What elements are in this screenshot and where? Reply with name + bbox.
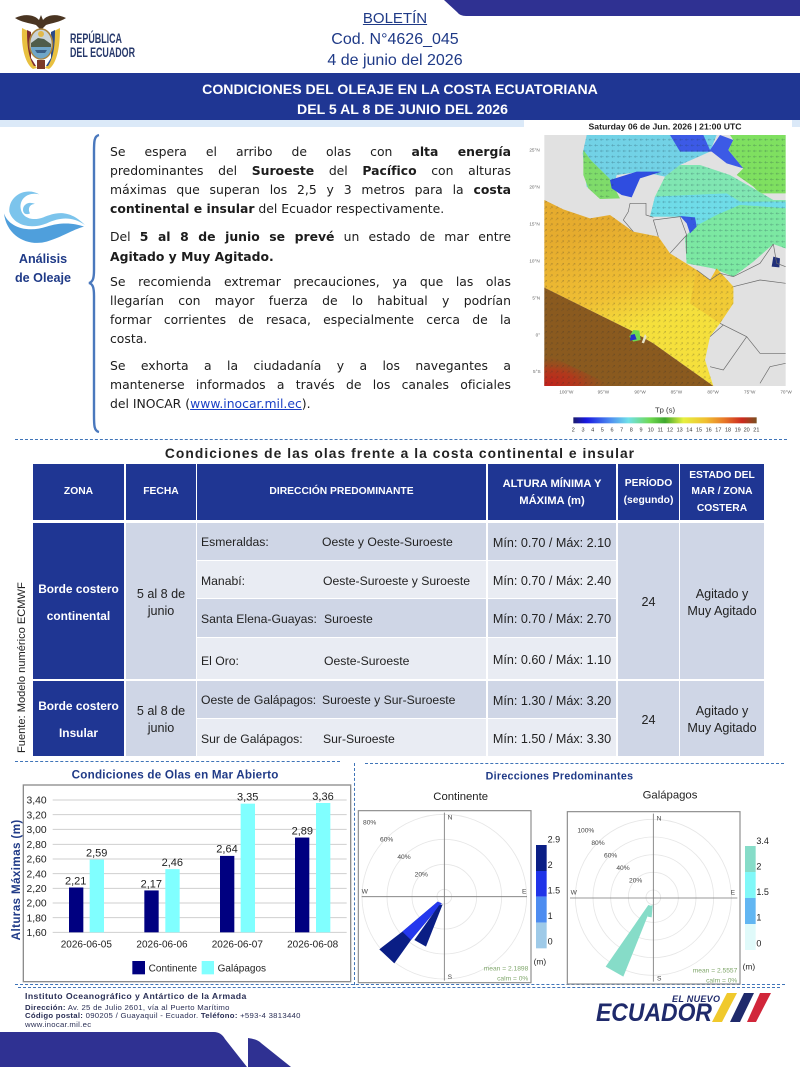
rose: Continente: 2.9: [548, 834, 560, 844]
table: wave conditions: ZONA: [64, 486, 93, 497]
latitude and longitude labels: 80°W: [707, 389, 719, 394]
rose: Galápagos: N: [657, 816, 662, 823]
analysis text: máximas que superan los 2,5 y 3 metros para la costa: [110, 182, 511, 197]
analysis text: formar corrientes de resaca, especialmente cerca de la: [110, 312, 511, 327]
rose: Continente: W: [362, 888, 369, 895]
table: wave conditions: Mín: 0.60 / Máx: 1.10: [493, 652, 611, 666]
latitude and longitude labels: 5°N: [532, 295, 540, 300]
colour bar: [572, 405, 759, 433]
bar value labels: 2,89: [292, 825, 313, 837]
rose: Continente: mean = 2.1898: [484, 965, 529, 972]
latitude and longitude labels: 10°N: [529, 259, 540, 264]
table: wave conditions: 24: [641, 595, 656, 609]
table: wave conditions: ALTURA MÍNIMA Y: [503, 478, 601, 490]
rose: Continente: calm = 0%: [497, 975, 528, 982]
y axis labels: 3,00: [27, 825, 47, 836]
bulletin heading: [327, 10, 463, 69]
logo: El Nuevo Ecuador: ECUADOR: [596, 999, 712, 1027]
rose: Galápagos: [567, 789, 769, 984]
rose: Continente: [358, 791, 560, 983]
table: wave conditions: Suroeste: [324, 612, 373, 626]
colour bar: 7: [620, 427, 623, 433]
rose: Galápagos: 2: [756, 862, 761, 872]
title band: DEL 5 AL 8 DE JUNIO DEL 2026: [297, 101, 508, 117]
bulletin heading: 4 de junio del 2026: [327, 52, 463, 69]
rose: Continente: 0: [548, 937, 553, 947]
rose: Continente: E: [522, 888, 527, 895]
rose: Galápagos: (m): [743, 962, 755, 972]
analysis text: continental e insular del Ecuador respectivamente.: [110, 201, 444, 216]
table: wave conditions: Sur de Galápagos:: [201, 732, 303, 746]
section label: Análisis de Oleaje: Análisis: [19, 252, 67, 266]
table: wave conditions: Oeste de Galápagos:: [201, 693, 316, 707]
rose: Galápagos: 40%: [616, 865, 630, 872]
table: wave conditions: (segundo): [624, 494, 673, 506]
y axis labels: 3,20: [27, 810, 47, 821]
y axis labels: [27, 796, 47, 939]
colour bar: Tp (s): [655, 405, 675, 414]
table: wave conditions: Sur-Suroeste: [323, 732, 395, 746]
logo: República del Ecuador emblem: [15, 15, 135, 69]
bars: Continente: [69, 838, 309, 932]
rose: Galápagos: E: [731, 890, 736, 897]
rose: Galápagos: 1: [756, 913, 761, 923]
legend: Galápagos: [218, 964, 266, 975]
rose: Galápagos: calm = 0%: [706, 977, 737, 984]
table: wave conditions: Borde costero: [38, 699, 119, 713]
analysis text: Se espera el arribo de olas con alta energía: [110, 144, 511, 159]
country borders: [623, 203, 786, 383]
analysis text: llegarían con mayor fuerza de lo habitual y podrían: [110, 293, 511, 308]
table: wave conditions: El Oro:: [201, 654, 239, 668]
table: wave conditions: PERÍODO: [625, 478, 672, 489]
colour bar: 18: [725, 427, 731, 433]
y axis labels: 2,40: [27, 869, 47, 880]
colour bar: 4: [591, 427, 594, 433]
footer institution text: Código postal: 090205 / Guayaquil - Ecuador. Teléfono: +593-4 3813440: [25, 1011, 301, 1020]
latitude and longitude labels: 0°: [536, 332, 540, 337]
table: wave conditions: MAR / ZONA: [691, 486, 753, 497]
colour bar: 21: [753, 427, 759, 433]
analysis text: mantenerse informados a través de los canales oficiales: [110, 377, 511, 392]
table title: Condiciones de las olas frente a la costa continental e insular: [165, 446, 635, 461]
Galapagos islands patch: [629, 330, 647, 343]
y axis title: Alturas Máximas (m): [10, 820, 23, 940]
rose: Continente: 60%: [380, 837, 393, 844]
brace: [88, 134, 100, 434]
y axis labels: 1,80: [27, 913, 47, 924]
rose: Galápagos: 20%: [629, 878, 642, 885]
rose: Galápagos: S: [657, 976, 662, 983]
logo: El Nuevo Ecuador: [596, 993, 771, 1027]
y axis labels: 1,60: [27, 928, 47, 939]
y axis labels: 2,80: [27, 840, 47, 851]
latitude and longitude labels: 25°N: [529, 147, 540, 152]
x axis labels: [61, 940, 339, 951]
rose: Continente: 1.5: [548, 886, 560, 896]
y axis labels: 2,20: [27, 884, 47, 895]
colour bar: 8: [630, 427, 633, 433]
table: wave conditions: DIRECCIÓN PREDOMINANTE: [269, 486, 414, 497]
rose: Continente: 80%: [363, 819, 376, 826]
latitude and longitude labels: 70°W: [780, 389, 792, 394]
table: wave conditions: Oeste-Suroeste: [324, 654, 409, 668]
table: wave conditions: Mín: 1.30 / Máx: 3.20: [493, 694, 611, 708]
table: wave conditions: Mín: 1.50 / Máx: 3.30: [493, 732, 611, 746]
footer institution text: Instituto Oceanográfico y Antártico de la Armada: [25, 991, 247, 1001]
latitude and longitude labels: 20°N: [529, 184, 540, 189]
y axis labels: 3,40: [27, 796, 47, 807]
bar value labels: 2,21: [65, 875, 86, 887]
bulletin heading: BOLETÍN: [363, 10, 427, 27]
latitude and longitude labels: 15°N: [529, 222, 540, 227]
rose: Continente: S: [448, 974, 453, 981]
colour bar: 5: [601, 427, 604, 433]
title band: CONDICIONES DEL OLEAJE EN LA COSTA ECUATORIANA: [202, 81, 598, 97]
table: wave conditions: Suroeste y Sur-Suroeste: [322, 693, 455, 707]
table: wave conditions: Mín: 0.70 / Máx: 2.10: [493, 536, 611, 550]
table: wave conditions: junio: [148, 604, 174, 618]
colour bar: 20: [744, 427, 750, 433]
table: wave conditions: Agitado y: [696, 704, 748, 718]
colour bar: 3: [581, 427, 585, 433]
table: wave conditions: COSTERA: [697, 503, 747, 514]
latitude and longitude labels: 85°W: [671, 389, 683, 394]
table: wave conditions: ESTADO DEL: [689, 470, 755, 481]
table: wave conditions: Muy Agitado: [687, 604, 757, 618]
colour bar: 15: [696, 427, 702, 433]
colour bar: 13: [677, 427, 683, 433]
table: wave conditions: Mín: 0.70 / Máx: 2.70: [493, 612, 611, 626]
footer institution text: www.inocar.mil.ec: [25, 1020, 91, 1029]
rose: Galápagos: 0: [756, 938, 761, 948]
table: wave conditions: Insular: [59, 726, 98, 740]
bulletin heading: Cod. N°4626_045: [331, 31, 459, 48]
colour bar: 16: [706, 427, 712, 433]
logo: República del Ecuador emblem: DEL ECUADOR: [70, 45, 135, 60]
table: wave conditions: [33, 464, 764, 756]
analysis text: predominantes del Suroeste del Pacífico con alturas: [110, 163, 511, 178]
rose: Galápagos: 60%: [604, 852, 617, 859]
latitude and longitude labels: 5°S: [533, 369, 541, 374]
analysis text: [110, 144, 511, 411]
colour bar: 17: [715, 427, 721, 433]
Caribbean waves: [583, 135, 786, 277]
table: wave conditions: 5 al 8 de: [137, 586, 185, 600]
latitude and longitude labels: [529, 147, 792, 394]
roses heading: Direcciones Predominantes: [486, 770, 633, 782]
bar value labels: [65, 791, 334, 891]
rose: Continente: 40%: [397, 854, 411, 861]
wind roses: predominant directions: [358, 770, 769, 985]
table: wave conditions: Agitado y: [696, 586, 748, 600]
bars: Galápagos: [90, 803, 330, 932]
chart frame: [23, 785, 351, 982]
analysis text: Del 5 al 8 de junio se prevé un estado de mar entre: [110, 229, 511, 244]
bar value labels: 3,36: [312, 791, 334, 803]
table: wave conditions: Muy Agitado: [687, 721, 757, 735]
gulf of Mexico waves: [583, 135, 786, 199]
Pacific orange-yellow swell: [544, 200, 733, 386]
rose: Galápagos: 3.4: [756, 836, 769, 846]
rose: Galápagos: Galápagos: [643, 789, 698, 801]
Pacific long period swell: [544, 288, 713, 386]
table: wave conditions: Esmeraldas:: [201, 535, 269, 549]
icon: wave: [4, 192, 85, 243]
section label: Análisis de Oleaje: de Oleaje: [15, 271, 71, 285]
colour bar: 14: [686, 427, 692, 433]
colour bar: 12: [667, 427, 673, 433]
x axis labels: 2026-06-08: [287, 940, 339, 951]
colour bar: 10: [648, 427, 654, 433]
y axis labels: 2,00: [27, 899, 47, 910]
colour bar: 2: [572, 427, 575, 433]
analysis text: Se exhorta a la ciudadanía y a los navegantes a: [110, 358, 511, 373]
latitude and longitude labels: 75°W: [744, 389, 756, 394]
logo: El Nuevo Ecuador: EL NUEVO: [672, 994, 720, 1004]
light strip under title band: [0, 120, 800, 127]
analysis text: Se recomienda extremar precauciones, ya que las olas: [110, 274, 511, 289]
table: wave conditions: Oeste-Suroeste y Suroeste: [323, 574, 470, 588]
x axis labels: 2026-06-07: [212, 940, 263, 951]
latitude and longitude labels: 95°W: [598, 389, 610, 394]
bar value labels: 2,59: [86, 848, 107, 860]
colour bar: 6: [610, 427, 614, 433]
y axis labels: 2,60: [27, 855, 47, 866]
analysis text: costa.: [110, 331, 147, 346]
bar value labels: 2,17: [141, 879, 162, 891]
table: wave conditions: FECHA: [143, 486, 179, 497]
source note: Fuente: Modelo numérico ECMWF: [16, 582, 28, 753]
analysis text: Agitado y Muy Agitado.: [110, 249, 274, 264]
legend: [132, 961, 266, 975]
chart title: Condiciones de Olas en Mar Abierto: [72, 768, 278, 781]
rose: Continente: 2: [548, 860, 553, 870]
red high period corner: [544, 353, 613, 386]
latitude and longitude labels: 100°W: [559, 389, 574, 394]
bar chart: maximum heights: [10, 768, 352, 982]
table: wave conditions: Oeste y Oeste-Suroeste: [322, 535, 453, 549]
rose: Galápagos: mean = 2.5557: [693, 967, 738, 974]
bar value labels: 2,46: [162, 857, 183, 869]
map timestamp: Saturday 06 de Jun. 2026 | 21:00 UTC: [588, 121, 742, 131]
rose: Continente: (m): [534, 957, 546, 967]
rose: Continente: 1: [548, 911, 553, 921]
footer corner shape: [0, 1032, 291, 1067]
legend: Continente: [149, 964, 197, 975]
rose: Continente: 20%: [415, 871, 428, 878]
rose: Galápagos: 80%: [591, 840, 605, 847]
bar value labels: 2,64: [216, 844, 238, 856]
rose: Galápagos: 100%: [577, 827, 594, 834]
x axis labels: 2026-06-06: [136, 940, 188, 951]
colour bar: 9: [639, 427, 643, 433]
table: wave conditions: 5 al 8 de: [137, 704, 185, 718]
map: wave period forecast: [529, 121, 792, 433]
rose: Galápagos: W: [571, 890, 578, 897]
rose: Continente: Continente: [433, 791, 488, 803]
footer institution text: Dirección: Av. 25 de Julio 2601, vía al Puerto Marítimo: [25, 1003, 230, 1012]
section label: Análisis de Oleaje: [15, 252, 71, 285]
colour bar: 11: [657, 427, 663, 433]
table: wave conditions: Mín: 0.70 / Máx: 2.40: [493, 574, 611, 588]
latitude and longitude labels: 90°W: [634, 389, 646, 394]
table: wave conditions: Manabí:: [201, 574, 245, 588]
rose: Continente: N: [448, 814, 453, 821]
title band: [0, 73, 800, 120]
bar value labels: 3,35: [237, 792, 258, 804]
analysis text: del INOCAR (www.inocar.mil.ec).: [110, 396, 311, 411]
table: wave conditions: Santa Elena-Guayas:: [201, 612, 317, 626]
table: wave conditions: MÁXIMA (m): [519, 494, 585, 506]
top right banner shape: [444, 0, 800, 16]
table: wave conditions: continental: [47, 608, 110, 622]
swell arrows: [544, 200, 733, 386]
land background: [544, 135, 786, 386]
x axis labels: 2026-06-05: [61, 940, 112, 951]
table: wave conditions: junio: [148, 721, 174, 735]
logo: República del Ecuador emblem: REPÚBLICA: [70, 31, 122, 46]
table: wave conditions: Borde costero: [38, 582, 119, 596]
rose: Galápagos: 1.5: [756, 887, 769, 897]
table: wave conditions: 24: [641, 712, 656, 726]
footer institution text: [25, 991, 301, 1029]
colour bar: 19: [735, 427, 741, 433]
